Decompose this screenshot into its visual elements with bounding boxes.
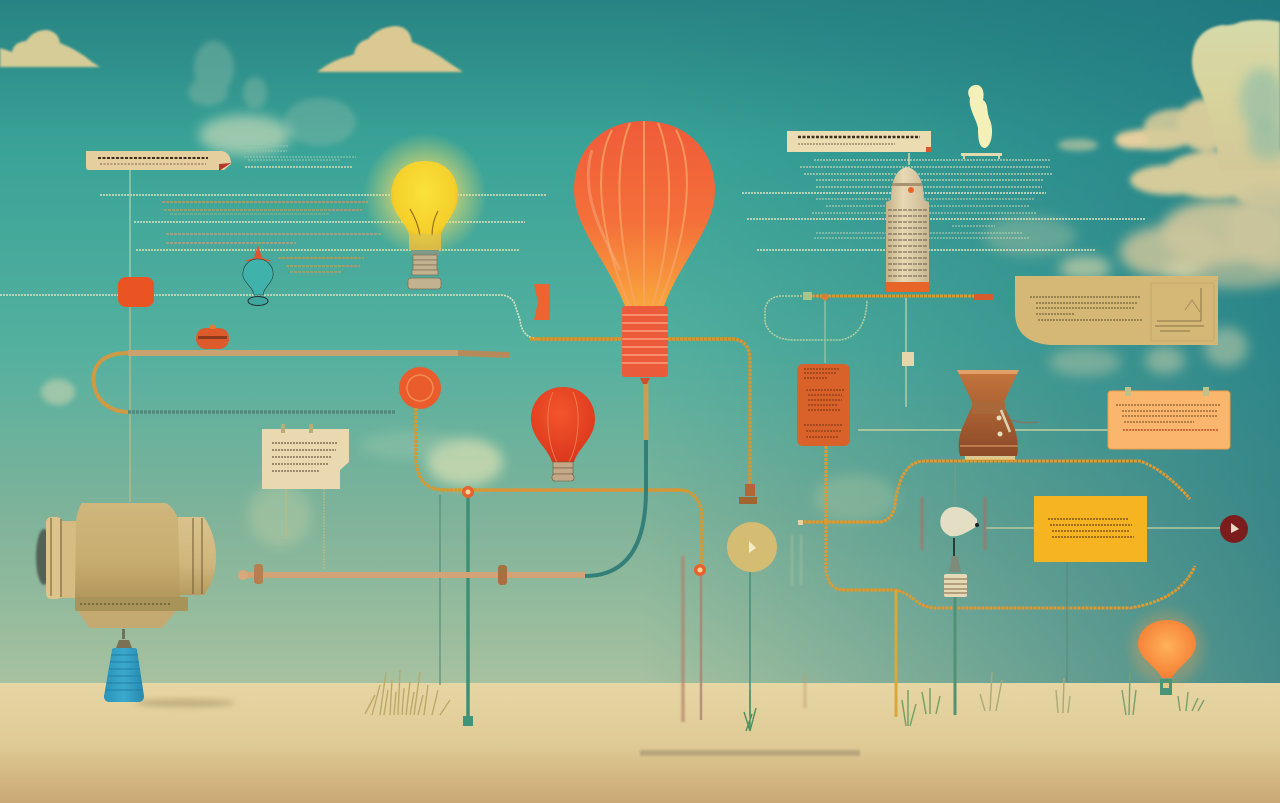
grass tufts — [365, 670, 1204, 731]
steam puff on shelf — [961, 85, 1002, 159]
glowing light bulb — [363, 133, 487, 289]
small square pipe end — [798, 520, 803, 525]
left U pipe — [94, 353, 510, 412]
cloud: right lower mass — [984, 188, 1280, 376]
left text lines — [0, 146, 546, 502]
striped cylinder bottle — [886, 167, 929, 292]
dark red play button — [1220, 515, 1248, 543]
blue cone base — [104, 648, 144, 702]
teal droplet icon — [243, 245, 273, 306]
pipe nodes — [462, 484, 757, 726]
lower right golden pipe loops — [800, 446, 1195, 608]
small orange balloon — [1131, 612, 1203, 695]
white horn device — [940, 507, 979, 597]
left banner with faux text — [86, 151, 231, 171]
orange stopper icon — [196, 325, 229, 349]
beige note with chart — [1015, 276, 1218, 345]
yellow sticky note — [1034, 496, 1147, 562]
thin connector lines — [683, 464, 1220, 722]
tan tank machine — [36, 503, 216, 648]
cloud: large right puffs — [1058, 99, 1280, 208]
right faux text lines — [742, 160, 1145, 250]
horizontal copper pipe — [238, 564, 585, 585]
connector end pieces — [803, 292, 993, 366]
right banner with faux text — [787, 131, 931, 165]
main golden pipe network — [416, 339, 750, 718]
copper coffee dripper — [957, 370, 1038, 460]
round gold play button — [727, 522, 777, 572]
orange disk valve — [399, 367, 441, 409]
peach pinned note — [1108, 387, 1230, 449]
cloud: faint mottled — [188, 41, 356, 146]
orange rounded block — [118, 277, 154, 307]
clouds — [0, 20, 1280, 547]
pinned note — [262, 424, 349, 570]
cloud: top left — [0, 30, 100, 67]
large hot air balloon — [574, 121, 715, 384]
cloud: top centre — [317, 26, 463, 72]
cloud: right top dome — [1192, 20, 1280, 170]
orange card — [797, 364, 850, 446]
connector line through dripper — [858, 429, 1108, 431]
upper right orange connector — [765, 296, 975, 407]
orange flag tag — [534, 284, 550, 320]
ground — [0, 683, 1280, 803]
small red balloon — [531, 387, 595, 481]
